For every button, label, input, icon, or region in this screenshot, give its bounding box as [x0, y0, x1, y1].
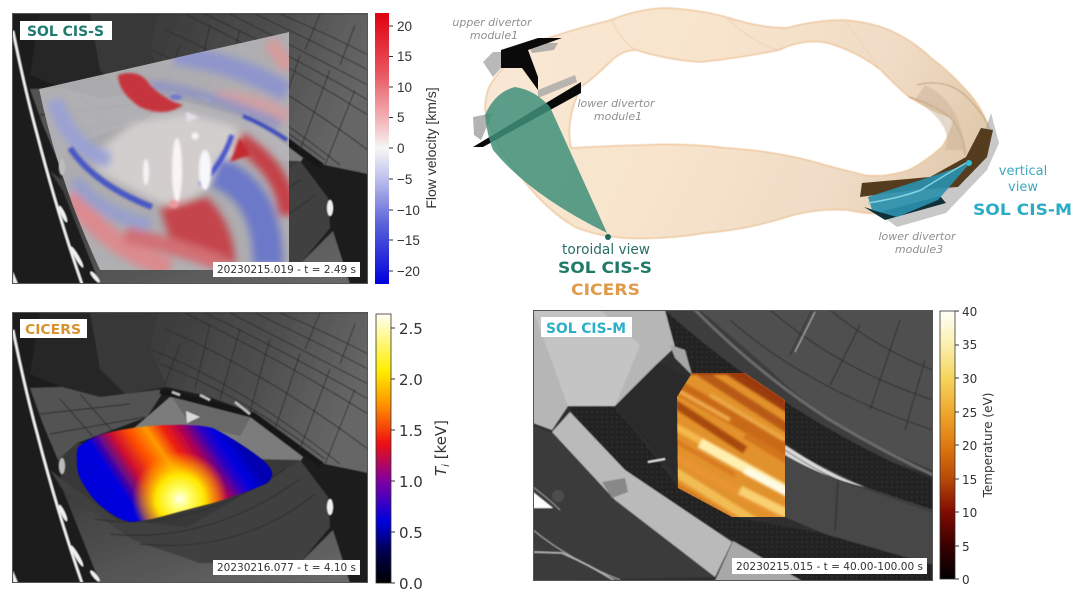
flow velocity overlay	[39, 32, 289, 270]
label: SOL CIS-M: SOL CIS-M	[546, 321, 626, 337]
colorbar: temperature: 35	[962, 338, 977, 352]
colorbar: ion temperature	[376, 314, 452, 593]
shot label: 20230215.019 - t = 2.49 s	[217, 264, 356, 276]
colorbar: ion temperature: 2.0	[399, 371, 423, 389]
label: vertical view: view	[1008, 180, 1038, 195]
label: SOL CIS-M: SOL CIS-M	[973, 200, 1072, 219]
tokamak interior render	[12, 312, 368, 583]
label: lower divertor module1: lower divertor	[578, 97, 654, 110]
colorbar: flow velocity: −15	[397, 233, 420, 248]
label: CICERS: CICERS	[25, 323, 81, 338]
shot label: 20230215.015 - t = 40.00-100.00 s	[736, 561, 923, 573]
colorbar: temperature: 30	[962, 372, 977, 386]
colorbar: temperature: 20	[962, 439, 977, 453]
diagram: plasma torus with views	[452, 8, 1072, 299]
temperature overlay	[677, 373, 785, 517]
colorbar: ion temperature: 2.5	[399, 320, 423, 338]
lower divertor module1 pieces	[473, 75, 581, 147]
colorbar: ion temperature: 1.5	[399, 422, 423, 440]
colorbar: flow velocity: 0	[397, 141, 405, 156]
panel: SOL CIS-M temperature	[533, 310, 933, 581]
label: vertical view: vertical	[999, 164, 1047, 179]
colorbar: temperature: 40	[962, 305, 977, 319]
colorbar: temperature: 15	[962, 473, 977, 487]
label: CICERS	[20, 319, 87, 338]
colorbar: flow velocity: −10	[397, 203, 420, 218]
colorbar: temperature: 0	[962, 573, 970, 587]
colorbar: flow velocity: −5	[397, 172, 412, 187]
colorbar: flow velocity: −20	[397, 264, 420, 279]
label: toroidal view: toroidal view	[562, 242, 650, 258]
label: upper divertor module1: module1	[470, 29, 518, 42]
label: SOL CIS-S: SOL CIS-S	[558, 258, 652, 277]
label: lower divertor module1: module1	[594, 110, 642, 123]
colorbar: ion temperature: 0.5	[399, 524, 423, 542]
shot label: 20230216.077 - t = 4.10 s	[217, 562, 356, 574]
colorbar: temperature: 5	[962, 540, 970, 554]
label: CICERS: CICERS	[571, 280, 640, 299]
plasma ring	[485, 8, 990, 238]
colorbar: temperature: Temperature (eV)	[981, 393, 995, 498]
colorbar: temperature: 25	[962, 406, 977, 420]
label: upper divertor module1: upper divertor	[452, 16, 532, 29]
colorbar: flow velocity: 10	[397, 80, 412, 95]
upper divertor module1 pieces	[483, 38, 562, 90]
colorbar: flow velocity: Flow velocity [km/s]	[423, 87, 439, 209]
colorbar: flow velocity: 20	[397, 19, 412, 34]
toroidal view cone	[485, 87, 611, 240]
lower divertor module3 pieces	[860, 113, 999, 227]
colorbar: flow velocity	[375, 13, 439, 284]
colorbar: ion temperature: T	[432, 465, 450, 476]
colorbar: temperature: 10	[962, 506, 977, 520]
colorbar: temperature	[940, 305, 995, 587]
tokamak interior render	[12, 13, 368, 284]
divertor interior render	[533, 310, 933, 581]
colorbar: flow velocity: 5	[397, 110, 405, 125]
panel: SOL CIS-S flow velocity	[12, 13, 368, 284]
colorbar: ion temperature: 0.0	[399, 575, 423, 593]
label: SOL CIS-S: SOL CIS-S	[27, 24, 104, 40]
colorbar: ion temperature: 1.0	[399, 473, 423, 491]
colorbar: flow velocity: 15	[397, 49, 412, 64]
colorbar: ion temperature: [keV]	[432, 420, 450, 464]
colorbar: ion temperature: i	[441, 464, 452, 467]
label: lower divertor module3: module3	[895, 243, 943, 256]
ion temperature overlay	[77, 425, 272, 522]
panel: CICERS ion temperature	[12, 312, 368, 583]
label: lower divertor module3: lower divertor	[879, 230, 955, 243]
